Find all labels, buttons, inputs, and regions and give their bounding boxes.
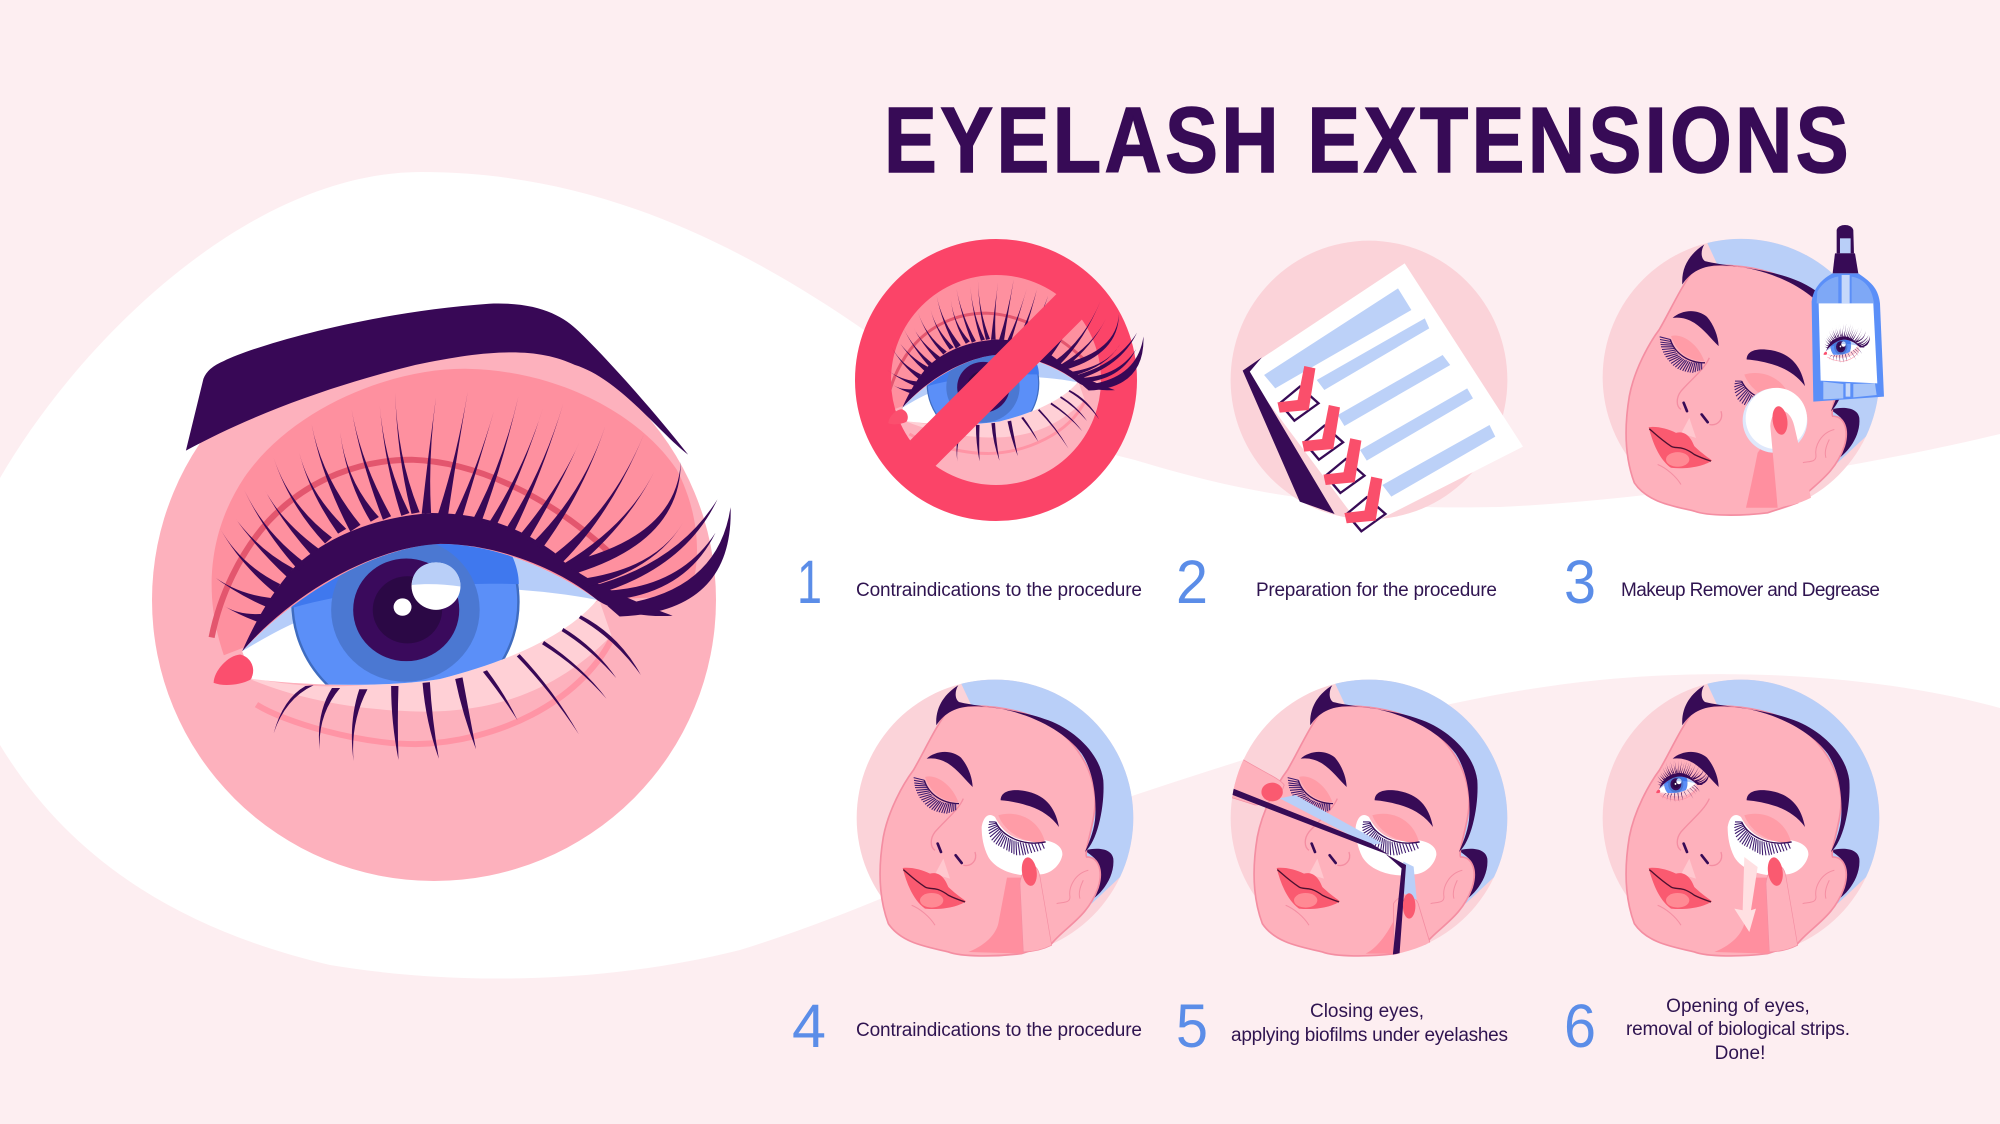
- caption 5: [1231, 1001, 1508, 1046]
- number 4: 4: [792, 992, 826, 1060]
- caption 6: Opening of eyes,: [1666, 996, 1810, 1017]
- background swoosh: [0, 172, 2000, 979]
- paper sheet: [1244, 263, 1523, 528]
- caption 6: removal of biological strips.: [1626, 1019, 1850, 1040]
- caption 5: applying biofilms under eyelashes: [1231, 1025, 1508, 1046]
- step 6 face with open eye and arrow: [1603, 670, 1888, 956]
- step 4 face with biofilm patch: [857, 670, 1142, 956]
- title: EYELASH EXTENSIONS: [884, 88, 1852, 192]
- step 1 prohibited eye icon: [873, 257, 1144, 503]
- check marks: [1277, 366, 1386, 531]
- caption 5: Closing eyes,: [1310, 1001, 1424, 1022]
- step 5 face with tweezers: [1228, 670, 1516, 957]
- caption 6: Done!: [1715, 1043, 1765, 1064]
- number 1: 1: [797, 548, 822, 616]
- main eye illustration: [152, 304, 731, 881]
- caption 3: Makeup Remover and Degrease: [1621, 580, 1880, 601]
- bottle: [1812, 225, 1884, 402]
- number 5: 5: [1176, 992, 1208, 1060]
- tweezers and fingers: [1228, 757, 1430, 957]
- number 2: 2: [1176, 548, 1208, 616]
- eyebrow: [186, 304, 688, 455]
- text lines: [1264, 288, 1495, 497]
- caption 2: Preparation for the procedure: [1256, 580, 1497, 601]
- number 6: 6: [1564, 992, 1596, 1060]
- step 2 checklist icon: [1231, 241, 1523, 531]
- number 3: 3: [1564, 548, 1596, 616]
- caption 4: Contraindications to the procedure: [856, 1020, 1142, 1041]
- step 3 face with cotton pad and bottle: [1603, 225, 1888, 515]
- caption 6: [1626, 996, 1850, 1064]
- large eye: [211, 369, 731, 761]
- caption 1: Contraindications to the procedure: [856, 580, 1142, 601]
